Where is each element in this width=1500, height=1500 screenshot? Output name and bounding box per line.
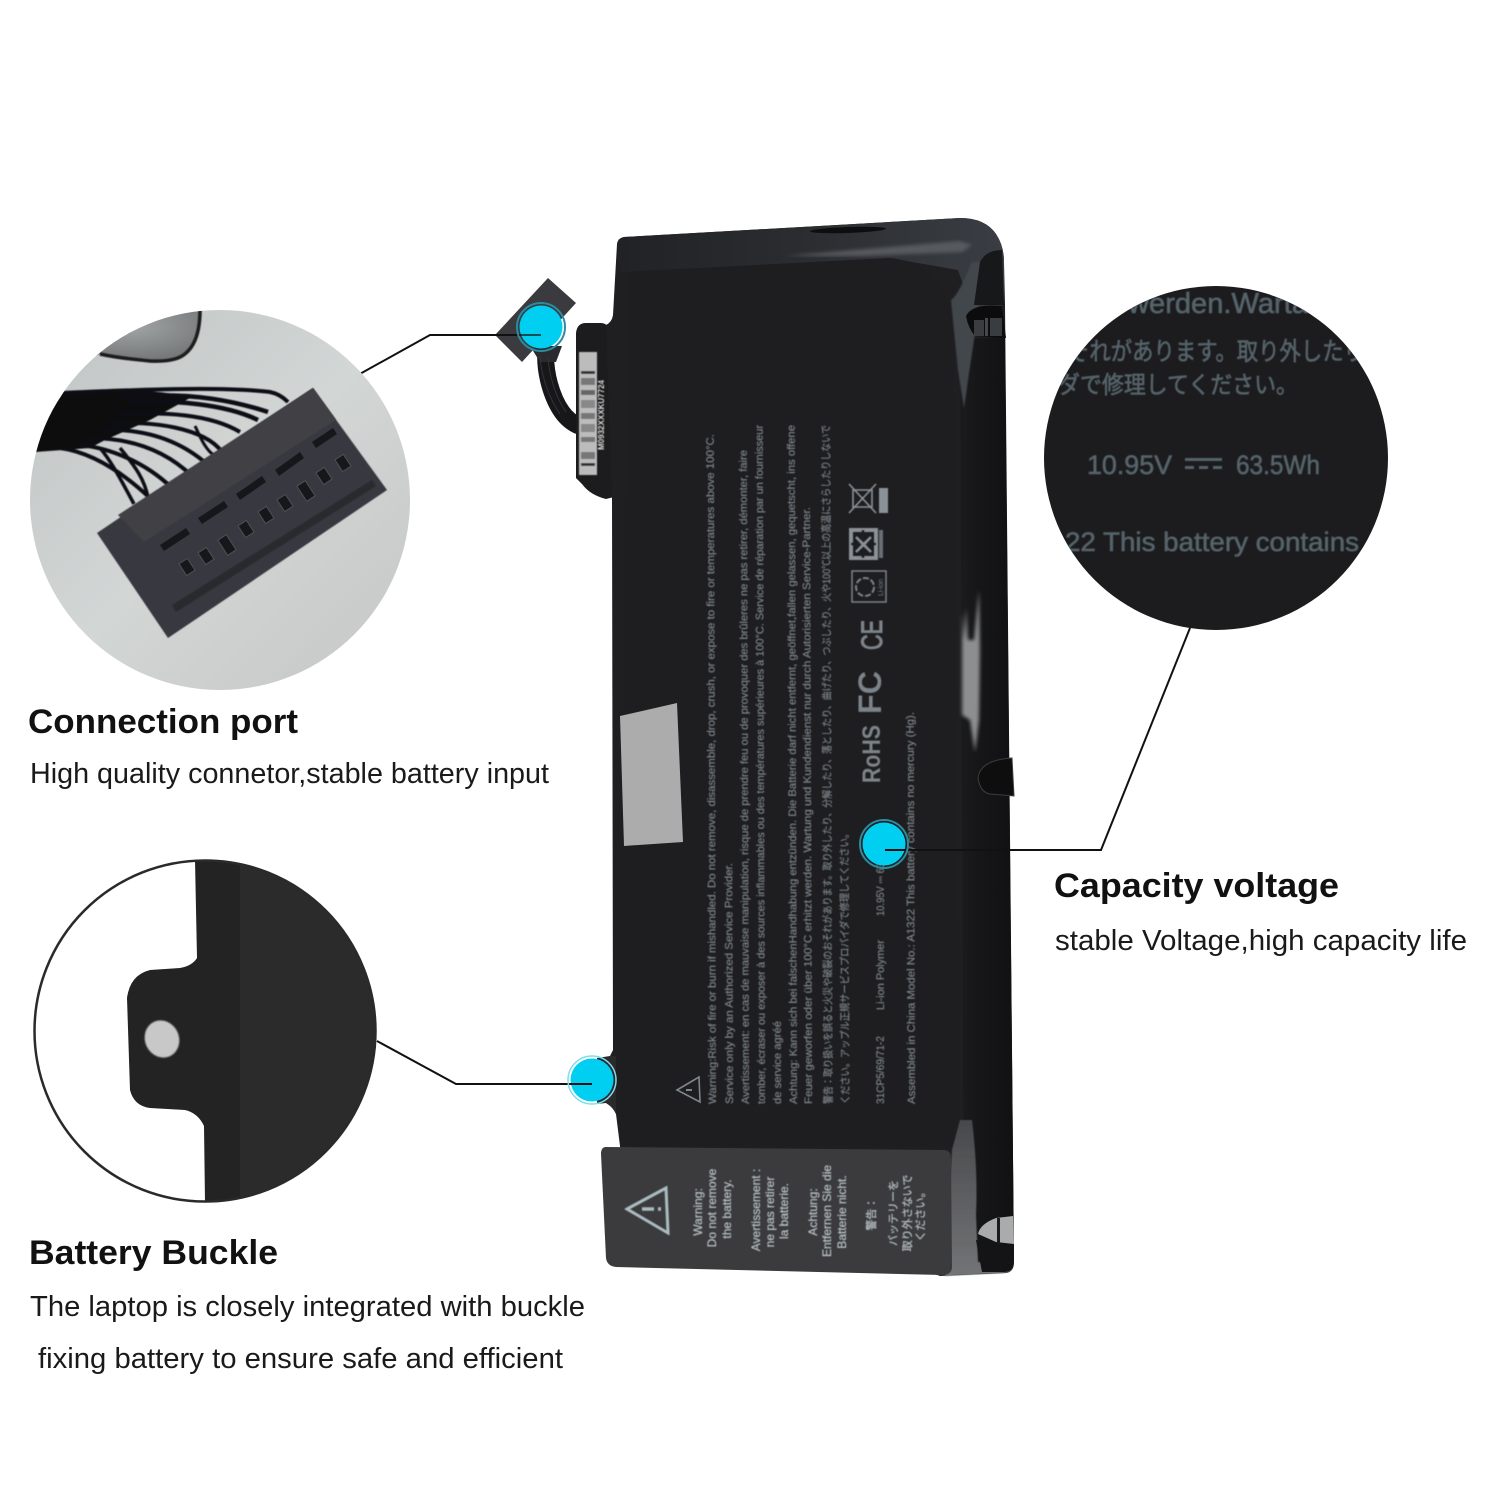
flap warning text: Avertissement : [749,1169,763,1251]
heading: battery buckle: Battery Buckle [29,1234,278,1272]
leader line: connection port [358,335,541,375]
description: battery buckle line 1: The laptop is closely integrated with buckle [30,1291,585,1323]
flap warning text: 警告： [864,1198,878,1230]
warning text block: Service only by an Authorized Service Provider. [723,863,736,1104]
caption: capacity voltage [1054,867,1467,957]
connector pin holes [179,454,351,576]
adapter outline [100,310,200,361]
description: capacity voltage: stable Voltage,high capacity life [1055,925,1467,957]
upper right clip notch [966,305,1006,338]
zoom circle: capacity voltage [1044,286,1388,630]
flap warning text: 取り外さないで [901,1175,914,1251]
warning text block: 警告：取り扱いを誤ると火災や破裂のおそれがあります。取り外したり、分解したり、落としたり、曲げたり、つぶしたり、火や100℃以上の高温にさらしたりしないで [819,425,835,1104]
solid wire mass [35,391,190,452]
marker: connection port [517,303,565,351]
right side band [960,336,1014,1262]
flap warning text: Do not remove [705,1168,719,1247]
connector top strip [118,388,336,542]
magnified label text: それがあります。取り外したり [1068,338,1365,366]
buckle side band [240,860,376,1202]
square recycling logo [851,530,883,558]
description: connection port: High quality connetor,stable battery input [30,758,549,790]
caption: battery buckle [29,1234,585,1375]
infographic canvas [29,218,1466,1374]
connector mount block [576,323,614,499]
connector slots [160,428,337,551]
zoom circle: connection port [30,310,410,690]
description: battery buckle line 2: fixing battery to ensure safe and efficient [38,1343,563,1375]
connector lower groove [172,480,376,612]
connector housing [97,388,387,638]
upper right reflection [951,262,982,408]
zoom circle: battery buckle [34,860,376,1202]
flap warning text: Warning: [691,1188,705,1236]
flap warning text: Batterie nicht. [835,1175,849,1249]
warning text block: tomber, écraser ou exposer à des sources inflammables ou des températures supérieures à 100°C. Service de réparation par un fournisseur [754,425,768,1104]
warning text block: ください。アップル正規サービスプロバイダで修理してください。 [837,829,852,1104]
magnified label text: 10.95V [1087,450,1172,480]
flap warning text: バッテリーを [887,1180,900,1246]
warning text block: 10.95V ⎓ 63.5Wh [875,841,887,916]
recycle box: Li-ion [878,579,885,596]
heading: connection port: Connection port [28,703,298,741]
magnified label text: ダで修理してください。 [1058,372,1298,399]
marker: capacity voltage [860,820,908,868]
top highlight [785,241,972,256]
flap warning text: ne pas retirer [763,1177,777,1247]
top glossy band [617,218,1004,310]
magnified label text: 22 This battery contains [1065,527,1359,557]
DC symbol [1185,458,1222,469]
mid right clip notch [978,758,1014,796]
warning text block: Feuer geworfen oder über 100°C erhitzt werden. Wartung und Kundendienst nur durch Autorisierten Service-Partner. [801,507,815,1104]
RoHS mark: RoHS [858,725,886,783]
flap warning text: Achtung: [806,1188,820,1236]
flap warning text: the battery. [720,1179,734,1239]
crossed bin [849,484,888,513]
buckle circle outline [34,860,376,1202]
top slot [810,226,886,234]
wire bundle [35,389,288,504]
warning text block: Achtung: Kann sich bei falschenHandhabung entzünden. Die Batterie darf nicht entfernt, geöffnet,fallen gelassen, gequetscht, ins offene [786,425,800,1104]
flap warning text: ください。 [914,1186,927,1242]
lower right gray strip [945,1120,1012,1276]
warning text block: de service agréé [772,1021,784,1104]
heading: capacity voltage: Capacity voltage [1054,867,1339,905]
warning text block [705,425,918,1104]
magnified label text: werden.Warta [1127,288,1309,320]
CE mark: CE [856,620,889,650]
battery photo [495,218,1014,1276]
battery connector cable [530,346,579,426]
battery connector plug [495,278,576,362]
silver sticker [620,703,683,846]
marker: battery buckle [568,1056,616,1104]
inner panel [620,258,960,1146]
mid right reflection [962,590,980,752]
buckle hole [144,1019,180,1059]
barcode label: M0932XXXKU7724 [597,379,606,450]
warning text block: Avertissement: en cas de mauvaise manipulation, risque de prendre feu ou de provoquer des brûleres ne pas retirer, démonter, faire [738,450,752,1104]
leader line: capacity voltage [885,628,1190,850]
background adapter shape [96,311,200,360]
small warning triangle [677,1077,700,1102]
lower right clip notch [976,1216,1014,1272]
flap warning triangle [627,1188,668,1233]
flap warning text: la batterie. [777,1183,791,1239]
leader line: battery buckle [377,1041,592,1084]
magnified label text [1058,288,1365,557]
warning text block: Assembled in China Model No.: A1322 This battery contains no mercury (Hg). [905,712,918,1104]
recycle box [852,571,886,602]
warning text block: Li-ion Polymer [875,940,887,1010]
flap warning text [691,1165,927,1257]
warning flap [601,1147,952,1275]
certification marks [849,484,889,783]
FC mark: FC [852,671,888,714]
buckle silhouette [127,862,240,1200]
warning text block: 31CP5/69/71-2 [875,1036,887,1104]
caption: connection port [28,703,549,790]
flap warning text: Entfernen Sie die [820,1165,834,1257]
warning text block: Warning:Risk of fire or burn if mishandled. Do not remove, disassemble, drop, crush, or expose to fire or temperatures above 100°C. [705,434,719,1104]
battery body [600,218,1014,1276]
right edge dark corner [974,250,1004,305]
magnified label text: 63.5Wh [1236,450,1320,480]
buckle tab on battery edge [597,1056,616,1114]
barcode label [579,352,606,475]
